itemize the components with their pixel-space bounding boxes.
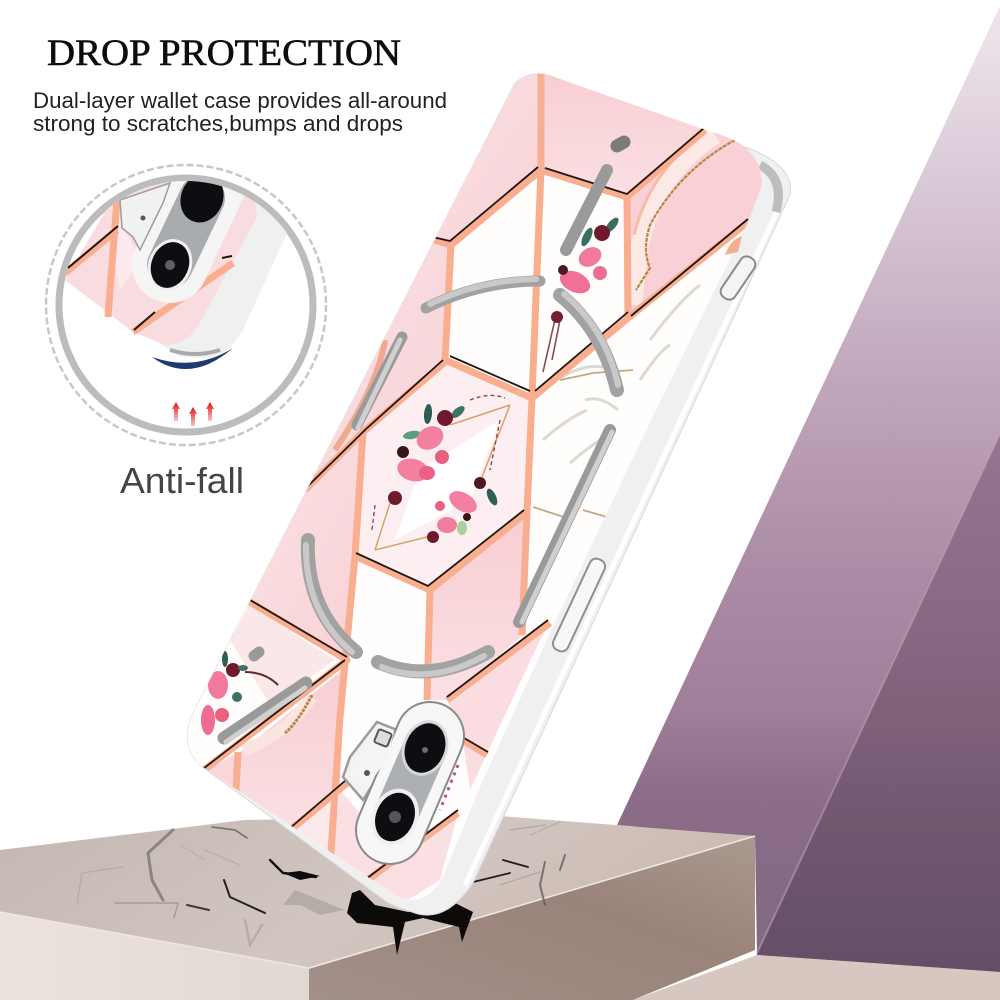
- description: Dual-layer wallet case provides all-around: [33, 88, 447, 113]
- pedestal top face: [0, 816, 755, 968]
- description: [33, 88, 447, 136]
- phone case: [170, 60, 791, 920]
- inset bumper: [106, 181, 287, 358]
- flowers top: [543, 216, 621, 372]
- clear bumper top shading: [760, 165, 778, 212]
- hexagon wash: [355, 363, 532, 587]
- rubble fragments: [283, 890, 345, 915]
- pedestal: [0, 816, 1000, 1000]
- title: DROP PROTECTION: [47, 33, 401, 74]
- blue shadow: [152, 348, 233, 369]
- ring highlight: [306, 279, 618, 674]
- island outline: [390, 736, 430, 830]
- cut-out slots: [224, 142, 624, 738]
- description: strong to scratches,bumps and drops: [33, 111, 403, 136]
- inset inlay lines: [65, 200, 233, 332]
- pedestal edge highlight: [0, 836, 755, 968]
- flash: [374, 729, 392, 747]
- hexagon inner white: [395, 420, 500, 540]
- volume button: [551, 556, 607, 654]
- swirl bottom left: [243, 697, 312, 750]
- pedestal right face: [309, 836, 755, 1000]
- flowers by camera: [440, 765, 458, 810]
- tile pale bottom: [297, 794, 339, 850]
- arrow left: [172, 402, 180, 421]
- island grey well: [395, 748, 425, 817]
- tile centre bottom: [427, 515, 525, 700]
- inset bumper rim: [170, 350, 220, 354]
- marble base: [188, 74, 760, 900]
- inset white notch: [116, 214, 135, 290]
- inset contents: [65, 167, 287, 369]
- crack hole small: [283, 871, 320, 880]
- inset lens upper: [173, 167, 231, 229]
- slot highlights: [226, 340, 612, 742]
- gold vein: [636, 140, 735, 290]
- mic dot: [364, 770, 370, 776]
- flower wreath: [372, 395, 510, 550]
- camera island: [343, 715, 455, 850]
- impact hole: [347, 890, 473, 955]
- clear bumper: [188, 74, 791, 915]
- tile pink base: [334, 792, 456, 900]
- back panel: [188, 74, 762, 900]
- inset flash module: [120, 183, 170, 250]
- marble grey veins: [543, 285, 700, 463]
- grey ring: [59, 178, 313, 432]
- agate swirl left: [335, 340, 385, 450]
- dark purple backdrop plane: [757, 434, 1000, 972]
- flash module: [343, 722, 397, 800]
- inset pink back: [65, 170, 257, 345]
- tile top left: [436, 74, 538, 240]
- pedestal left face: [0, 912, 309, 1000]
- cracks: [77, 822, 565, 945]
- arrow right: [206, 402, 214, 421]
- purple backdrop panel: [617, 6, 1000, 972]
- backdrop fold highlight: [757, 434, 1000, 953]
- flowers lower left: [201, 651, 278, 735]
- arrow middle: [189, 407, 197, 426]
- inset black accents: [68, 226, 232, 330]
- anti-fall label: Anti-fall: [120, 460, 244, 501]
- lens glint: [389, 811, 401, 823]
- marble veins: [533, 370, 633, 518]
- inset lens glint: [165, 260, 175, 270]
- peach swirl: [634, 133, 705, 235]
- dashed outer ring: [46, 165, 326, 445]
- geometric inlay lines: [195, 70, 748, 887]
- lens lower: [365, 784, 425, 850]
- tile top: [544, 74, 701, 193]
- magnetic ring arcs: [308, 281, 617, 671]
- tile left: [314, 243, 448, 476]
- red arrows: [172, 402, 214, 426]
- tile lower left: [252, 441, 359, 653]
- agate swirl: [633, 135, 715, 305]
- inset well: [170, 198, 202, 265]
- inset mic dot: [140, 216, 146, 220]
- lens glint upper: [422, 747, 428, 753]
- gold vein bottom left: [285, 695, 312, 733]
- clear bumper outer highlight: [465, 205, 780, 885]
- power button: [718, 254, 758, 302]
- tile top right marble: [630, 130, 762, 310]
- tile bottom right: [447, 623, 550, 790]
- tile bottom left: [240, 672, 342, 826]
- tile pale left wedge: [208, 754, 234, 787]
- inset island: [170, 175, 212, 265]
- detail inset: [46, 165, 326, 445]
- tile corner wash: [230, 605, 335, 705]
- black accent lines: [195, 128, 748, 885]
- flash module inner: [350, 727, 394, 790]
- lens upper: [395, 715, 455, 781]
- island white ring: [390, 736, 430, 830]
- peach notch: [725, 236, 742, 255]
- floor step: [633, 955, 1000, 1000]
- inset lens lower: [142, 234, 198, 296]
